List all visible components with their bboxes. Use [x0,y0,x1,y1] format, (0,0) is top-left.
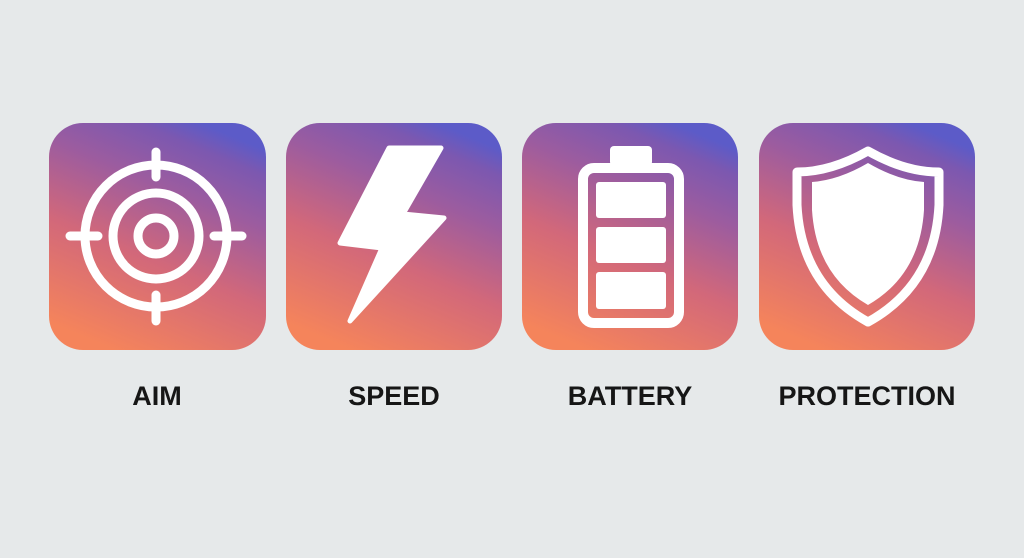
tile: speed [286,123,502,350]
icon: lightning bolt [340,148,444,321]
tile: protection [759,123,975,350]
icon: battery [583,146,679,323]
label: aim: AIM [132,381,182,411]
icon: target [70,152,242,321]
icon: shield [797,151,939,322]
label: speed: SPEED [348,381,440,411]
label: battery: BATTERY [568,381,692,411]
tile: aim [49,123,266,350]
tile: battery [522,123,738,350]
label: protection: PROTECTION [778,381,956,411]
